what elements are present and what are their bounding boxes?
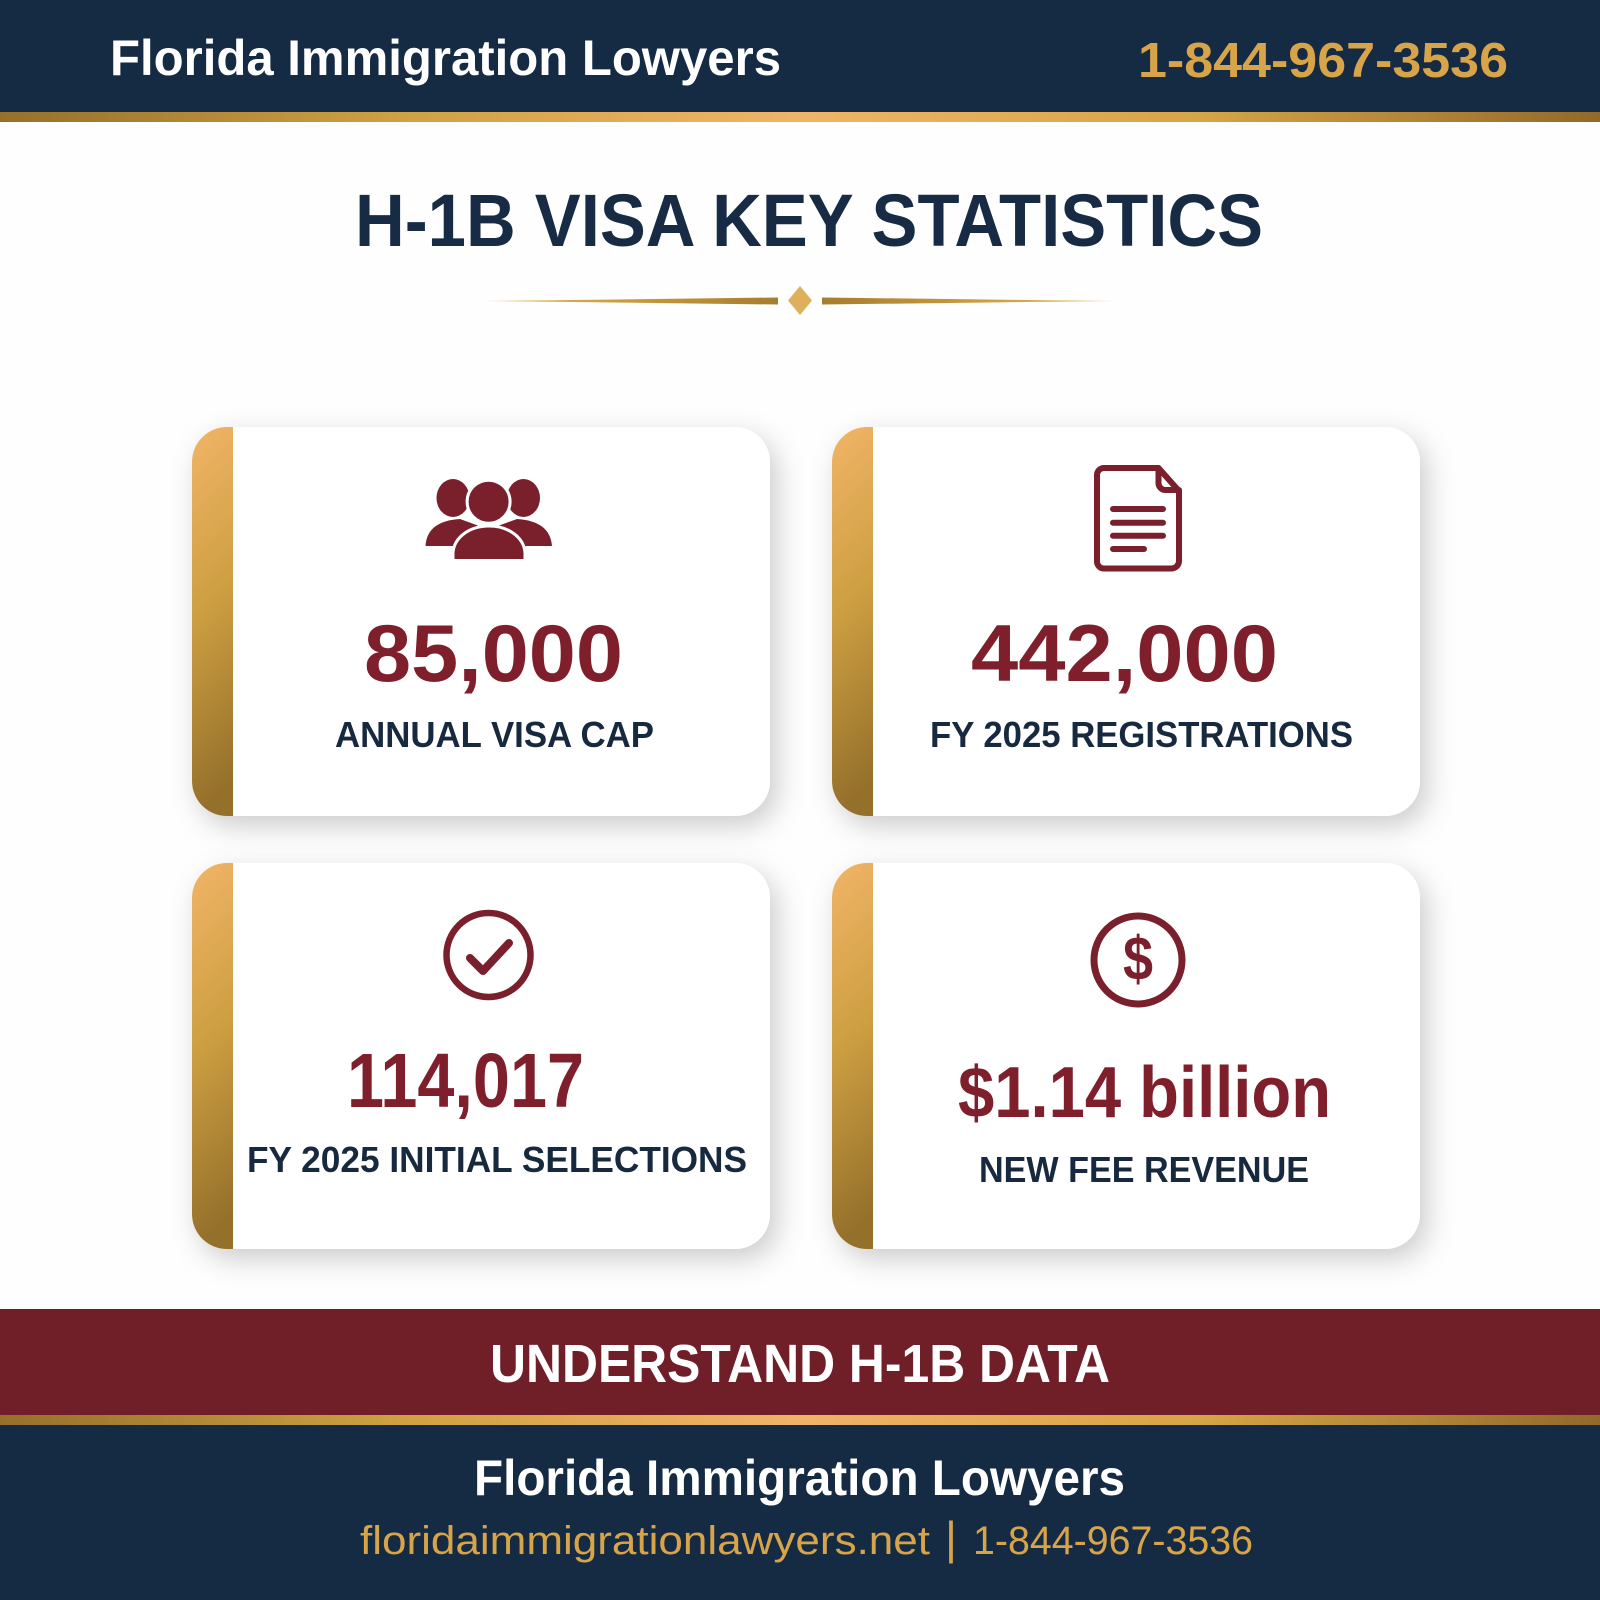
icon: document <box>1097 468 1179 568</box>
panel: FY 2025 initial selections <box>192 863 770 1249</box>
footer contact line <box>360 1512 1253 1564</box>
icon: dollar coin: $ <box>1123 925 1153 994</box>
icon: dollar coin <box>1094 916 1182 1004</box>
stat label: NEW FEE REVENUE <box>979 1149 1309 1190</box>
panel: annual visa cap <box>192 427 770 816</box>
footer contact line: | <box>945 1512 957 1564</box>
stat label: FY 2025 REGISTRATIONS <box>930 714 1353 755</box>
header brand name: Florida Immigration Lowyers <box>110 30 781 86</box>
footer contact line: floridaimmigrationlawyers.net <box>360 1519 930 1563</box>
header phone number: 1-844-967-3536 <box>1138 34 1508 88</box>
footer <box>0 1425 1600 1600</box>
call to action text: UNDERSTAND H-1B DATA <box>490 1334 1110 1394</box>
stat label: FY 2025 INITIAL SELECTIONS <box>247 1139 747 1180</box>
header bar <box>0 0 1600 122</box>
stat value: 114,017 <box>347 1038 584 1124</box>
call to action band <box>0 1309 1600 1415</box>
stat value: 442,000 <box>971 609 1278 699</box>
stat value: $1.14 billion <box>958 1053 1331 1133</box>
footer brand name: Florida Immigration Lowyers <box>474 1450 1125 1506</box>
footer gold rule <box>0 1415 1600 1425</box>
title: H-1B VISA KEY STATISTICS <box>355 179 1263 262</box>
stat value: 85,000 <box>364 609 623 699</box>
stat label: ANNUAL VISA CAP <box>335 714 654 755</box>
panel: new fee revenue <box>832 863 1420 1249</box>
panel: FY 2025 registrations <box>832 427 1420 816</box>
footer contact line: 1-844-967-3536 <box>973 1519 1253 1563</box>
icon: check mark in circle <box>446 913 530 997</box>
title divider with diamond <box>485 286 1114 315</box>
icon: group of people <box>426 479 552 560</box>
